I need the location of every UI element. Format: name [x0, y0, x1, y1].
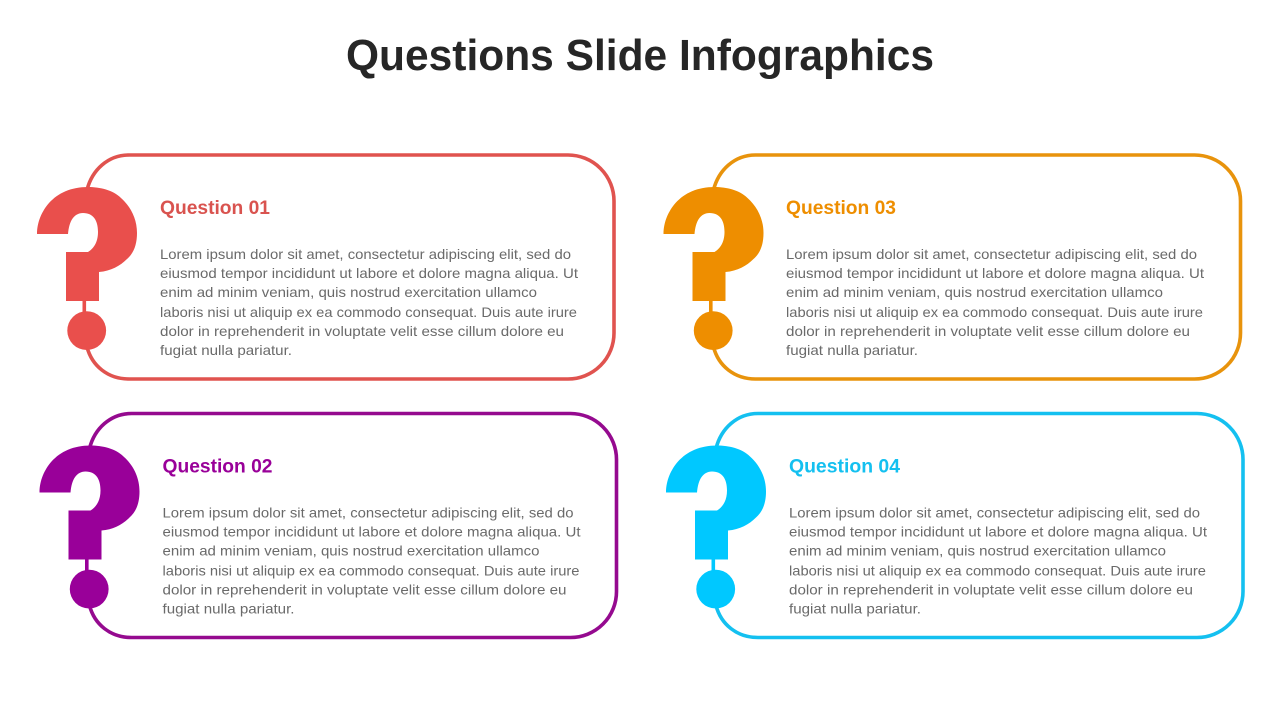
panel: question 04 [666, 414, 1243, 638]
text block [789, 504, 1207, 616]
text block: Lorem ipsum dolor sit amet, consectetur adipiscing elit, sed do [162, 504, 574, 520]
icon: question mark [664, 187, 764, 350]
text block: Lorem ipsum dolor sit amet, consectetur adipiscing elit, sed do [786, 246, 1197, 262]
text block: Lorem ipsum dolor sit amet, consectetur adipiscing elit, sed do [789, 504, 1200, 520]
heading: Question 02 [162, 456, 272, 478]
text block: enim ad minim veniam, quis nostrud exercitation ullamco [162, 542, 540, 558]
text block: dolor in reprehenderit in voluptate velit esse cillum dolore eu [789, 582, 1193, 598]
icon: question mark [666, 446, 766, 608]
panel outline [90, 414, 616, 638]
panel outline [87, 155, 614, 379]
text block: enim ad minim veniam, quis nostrud exercitation ullamco [786, 284, 1163, 300]
text block: fugiat nulla pariatur. [160, 342, 292, 358]
text block: dolor in reprehenderit in voluptate velit esse cillum dolore eu [160, 323, 564, 339]
text block: enim ad minim veniam, quis nostrud exercitation ullamco [789, 542, 1166, 558]
panel outline [716, 414, 1243, 638]
text block: fugiat nulla pariatur. [789, 600, 921, 616]
text block: fugiat nulla pariatur. [786, 342, 918, 358]
text block: laboris nisi ut aliquip ex ea commodo consequat. Duis aute irure [162, 562, 580, 578]
text block: eiusmod tempor incididunt ut labore et dolore magna aliqua. Ut [789, 524, 1207, 540]
text block: Lorem ipsum dolor sit amet, consectetur adipiscing elit, sed do [160, 246, 571, 262]
text block: laboris nisi ut aliquip ex ea commodo consequat. Duis aute irure [789, 562, 1206, 578]
icon: question mark [37, 187, 137, 350]
panel: question 03 [664, 155, 1240, 379]
panel: question 02 [40, 414, 616, 638]
text block: laboris nisi ut aliquip ex ea commodo consequat. Duis aute irure [160, 304, 577, 320]
text block: fugiat nulla pariatur. [162, 600, 294, 616]
heading: Question 04 [789, 456, 900, 478]
title: Questions Slide Infographics [346, 31, 934, 80]
heading: Question 03 [786, 198, 896, 219]
text block: dolor in reprehenderit in voluptate velit esse cillum dolore eu [162, 582, 566, 598]
panel: question 01 [37, 155, 614, 379]
text block [162, 504, 581, 616]
text block: eiusmod tempor incididunt ut labore et dolore magna aliqua. Ut [786, 265, 1204, 281]
text block [786, 246, 1204, 358]
text block: dolor in reprehenderit in voluptate velit esse cillum dolore eu [786, 323, 1190, 339]
text block [160, 246, 578, 358]
panel outline [714, 155, 1240, 379]
heading: Question 01 [160, 198, 270, 219]
text block: eiusmod tempor incididunt ut labore et dolore magna aliqua. Ut [160, 265, 578, 281]
text block: laboris nisi ut aliquip ex ea commodo consequat. Duis aute irure [786, 304, 1203, 320]
text block: enim ad minim veniam, quis nostrud exercitation ullamco [160, 284, 537, 300]
icon: question mark [40, 446, 140, 608]
text block: eiusmod tempor incididunt ut labore et dolore magna aliqua. Ut [162, 524, 581, 540]
